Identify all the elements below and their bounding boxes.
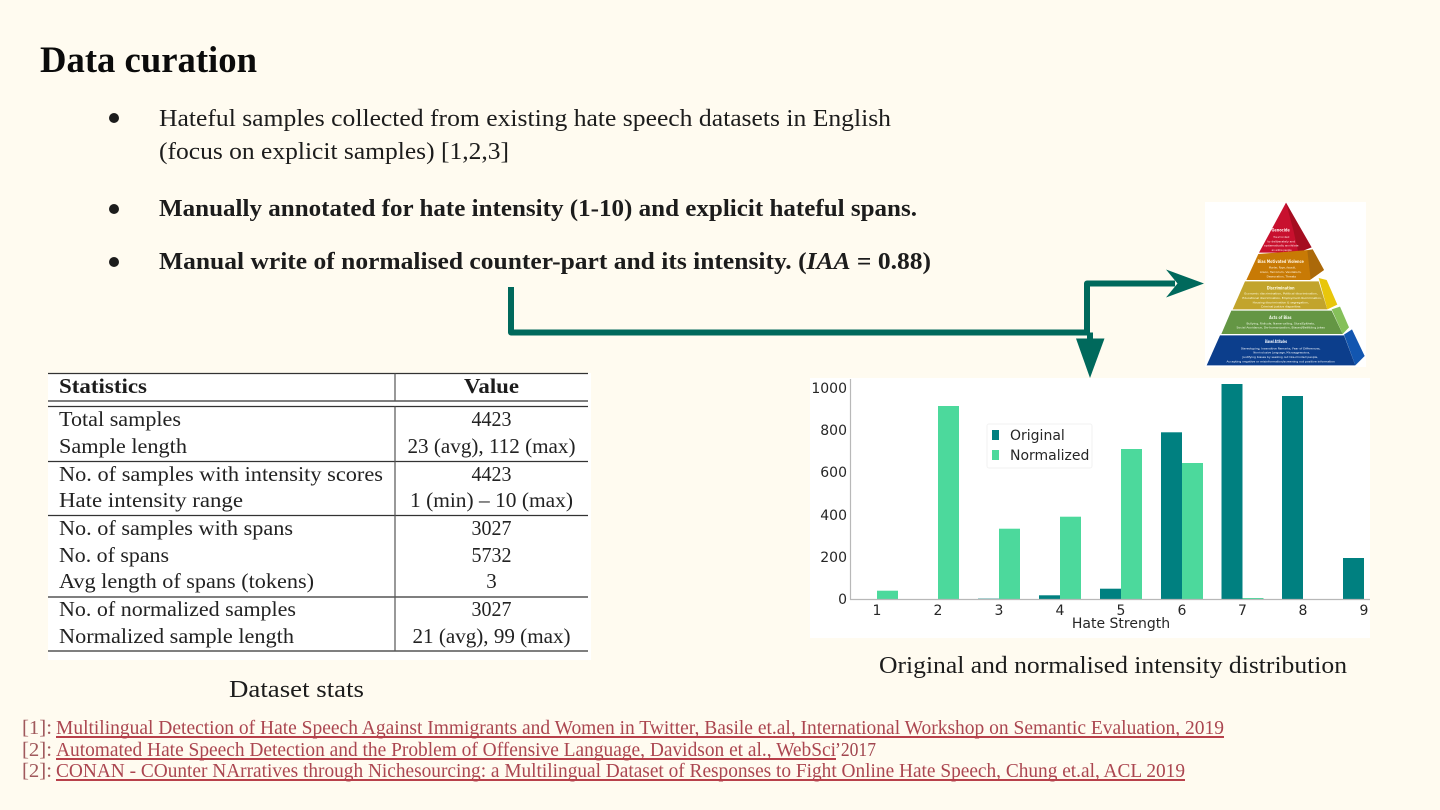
x axis labels: 1	[873, 603, 881, 619]
y axis labels: 1000	[811, 381, 847, 397]
chart legend	[987, 424, 1092, 468]
table row values: 23 (avg), 112 (max)	[408, 434, 576, 458]
reference 3: CONAN - COunter NArratives through Nichesourcing: a Multilingual Dataset of Responses to Fight Online Hate Speech, Chung et.al, ACL 2019	[56, 760, 1185, 782]
pyramid of hate image	[1205, 202, 1366, 367]
reference 1: [1]:	[22, 717, 52, 739]
tier: biased attitudes	[1207, 329, 1365, 365]
reference 2: Automated Hate Speech Detection and the Problem of Offensive Language, Davidson et al., WebSci	[56, 739, 836, 761]
table row values: 3027	[472, 597, 512, 621]
tier: discrimination: Housing discrimination & segregation,	[1253, 300, 1309, 304]
y axis labels: 600	[820, 465, 847, 481]
x axis labels: 9	[1360, 603, 1368, 619]
caption: dataset stats: Dataset stats	[229, 677, 364, 703]
reference 3: [2]:	[22, 760, 52, 782]
x axis labels: 7	[1238, 603, 1247, 619]
table row values: 21 (avg), 99 (max)	[412, 624, 571, 648]
caption: intensity distribution: Original and normalised intensity distribution	[879, 653, 1347, 679]
table row values: 5732	[472, 543, 512, 567]
tier: genocide: to deliberately and	[1267, 239, 1295, 243]
tier: acts of bias	[1221, 307, 1349, 334]
y axis labels: 800	[820, 423, 847, 439]
tier: genocide: an entire people	[1272, 248, 1292, 252]
tier: bias motivated violence: Bias Motivated Violence	[1257, 259, 1304, 264]
tier: biased attitudes: Non-inclusive Language, Microaggressions,	[1253, 351, 1310, 355]
title: Data curation	[40, 40, 257, 81]
y axis labels: 0	[838, 592, 847, 608]
tier: bias motivated violence: Murder, Rape, Assault,	[1269, 266, 1296, 270]
x axis labels: 5	[1117, 603, 1125, 619]
x axis labels: 3	[995, 603, 1003, 619]
table row labels: Normalized sample length	[59, 624, 295, 648]
table header: Statistics	[59, 374, 147, 398]
reference 2: [2]:	[22, 739, 52, 761]
tier: genocide: systematically annihilate	[1264, 244, 1299, 248]
arrow: from bullets to pyramid and chart	[511, 270, 1204, 378]
table row labels: No. of normalized samples	[59, 597, 296, 621]
table row labels: Hate intensity range	[59, 488, 243, 512]
y axis labels	[811, 381, 847, 608]
bullet list	[109, 106, 931, 275]
table row labels: No. of samples with spans	[59, 516, 293, 540]
table row values: 3	[486, 569, 497, 593]
table row labels: Total samples	[59, 407, 181, 431]
bars: original	[978, 384, 1364, 599]
x axis labels: Hate Strength	[1072, 616, 1170, 632]
table row values: 1 (min) – 10 (max)	[410, 488, 573, 512]
table row labels: Sample length	[59, 434, 188, 458]
table row labels	[59, 407, 383, 648]
tier: acts of bias: Acts of Bias	[1269, 315, 1292, 320]
tier: bias motivated violence: Arson, Terrorism, Vandalism,	[1260, 270, 1302, 274]
table row values: 4423	[472, 462, 512, 486]
tier: discrimination	[1233, 278, 1337, 309]
tier: acts of bias: Social Avoidance, De-humanization, Biased/Belittling jokes	[1236, 326, 1325, 330]
chart axes	[850, 379, 1370, 600]
bar chart: hate strength distribution	[810, 378, 1370, 638]
chart legend: Original	[1010, 428, 1065, 444]
tier: bias motivated violence	[1246, 249, 1324, 280]
reference 1: Multilingual Detection of Hate Speech Against Immigrants and Women in Twitter, Basile et.al, International Workshop on Semantic Evaluation, 2019	[56, 717, 1224, 739]
bullet 1: hateful samples: Hateful samples collected from existing hate speech datasets in English	[159, 106, 891, 132]
bullet 3: normalised counterpart: Manual write of normalised counter-part and its intensity. ( IAA = 0.88)	[159, 249, 931, 275]
x axis labels: 8	[1299, 603, 1307, 619]
tier: biased attitudes: Biased Attitudes	[1265, 339, 1287, 344]
table row labels: No. of samples with intensity scores	[59, 462, 383, 486]
reference 2: ’2017	[835, 739, 876, 761]
bars: normalized	[877, 406, 1264, 599]
tier: discrimination: Economic discrimination, Political discrimination,	[1244, 292, 1318, 296]
table header	[59, 374, 519, 398]
tier: biased attitudes: Accepting negative or misinformation/screening out positive information	[1226, 359, 1335, 363]
bullet 2: manual annotation: Manually annotated for hate intensity (1-10) and explicit hateful spans.	[159, 196, 917, 222]
table header: Value	[464, 374, 519, 398]
table: dataset statistics	[48, 373, 591, 660]
table row values: 4423	[472, 407, 512, 431]
tier: acts of bias: Bullying, Ridicule, Name-calling, Slurs/Epithets,	[1246, 322, 1315, 326]
x axis labels	[873, 603, 1368, 632]
tier: discrimination: Educational discrimination, Employment discrimination,	[1242, 296, 1322, 300]
chart legend: Normalized	[1010, 448, 1089, 464]
y axis labels: 200	[820, 550, 847, 566]
bullet 1: hateful samples	[109, 106, 891, 165]
y axis labels: 400	[820, 508, 847, 524]
bullet 1: hateful samples: (focus on explicit samples) [1,2,3]	[159, 139, 509, 165]
table row labels: Avg length of spans (tokens)	[59, 569, 314, 593]
table row labels: No. of spans	[59, 543, 169, 567]
table row values	[408, 407, 576, 648]
tier: genocide: The act or intent	[1273, 235, 1290, 239]
x axis labels: 6	[1178, 603, 1187, 619]
x axis labels: 2	[934, 603, 942, 619]
table row values: 3027	[472, 516, 512, 540]
tier: bias motivated violence: Desecration, Threats	[1267, 274, 1296, 278]
tier: discrimination: Discrimination	[1267, 285, 1295, 290]
tier: genocide: Genocide	[1271, 227, 1290, 232]
tier: biased attitudes: Justifying biases by seeking out like-minded people,	[1242, 355, 1318, 359]
tier: discrimination: Criminal justice disparities	[1261, 305, 1301, 309]
references	[22, 717, 1224, 782]
tier: biased attitudes: Stereotyping, Insensitive Remarks, Fear of Differences,	[1241, 346, 1321, 350]
tier: genocide	[1259, 203, 1312, 253]
x axis labels: 4	[1056, 603, 1065, 619]
